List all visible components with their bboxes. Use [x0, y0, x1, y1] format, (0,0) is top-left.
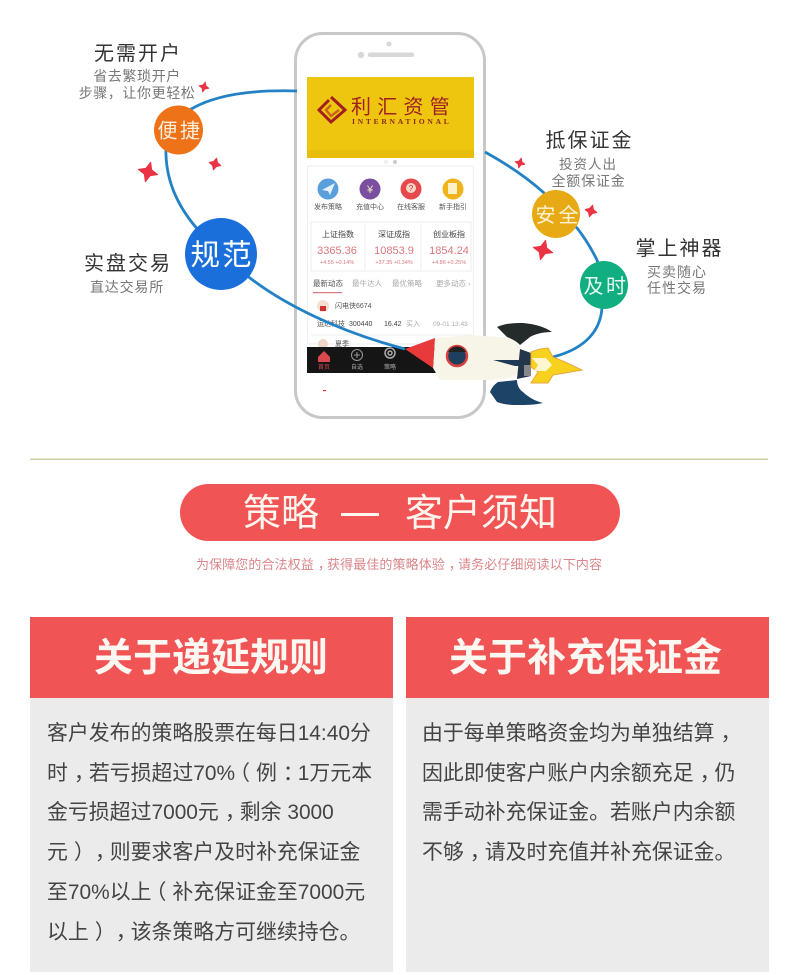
panel text: 因此即使客户账户内余额充足 ，仍	[422, 762, 735, 785]
nav labels: 策略	[384, 363, 396, 371]
icon: publish: 发布策略	[314, 202, 342, 211]
index: Shanghai: 上证指数	[322, 229, 354, 239]
icon: guide: 新手指引	[439, 202, 467, 211]
label: 掌上神器: 掌上神器	[636, 237, 724, 260]
small red mark	[323, 390, 326, 391]
phone speaker and camera	[358, 42, 414, 58]
icon: recharge: ¥	[366, 184, 374, 196]
feed tabs: 更多动态 ›	[436, 278, 471, 288]
label: 掌上神器	[636, 237, 724, 296]
icon: add	[352, 350, 362, 360]
label: 抵保证金	[546, 129, 634, 189]
feed tabs: 最优策略	[392, 278, 422, 288]
icon: guide	[439, 178, 467, 211]
rocket centre fin	[493, 360, 548, 366]
panel text: 以上 ），该条策略方可继续持仓。	[47, 921, 360, 944]
connecting curve	[166, 91, 604, 357]
node: 便捷: 便捷	[158, 120, 202, 142]
feed item: 闪电侠6674	[335, 301, 372, 310]
panel text: 金亏损超过7000元 ，剩余 3000	[47, 801, 334, 824]
nav labels: 自选	[351, 363, 363, 371]
decorative stars	[136, 81, 598, 262]
label: 掌上神器: 任性交易	[647, 280, 707, 296]
rocket nose	[405, 338, 435, 368]
app menu icons	[314, 178, 467, 211]
index: Shanghai	[317, 229, 357, 266]
phone body	[296, 34, 484, 418]
panel text: 客户发布的策略股票在每日14:40分	[47, 722, 371, 745]
panel background	[406, 617, 769, 972]
carousel dots	[384, 160, 397, 164]
feed tabs: 最牛达人	[352, 278, 382, 288]
rocket body	[433, 335, 522, 380]
index: Shenzhen: +37.35 +0.34%	[375, 260, 413, 266]
feed tabs: 最新动态	[313, 278, 343, 288]
feed item: 09-01 13:43	[433, 321, 468, 328]
label: 抵保证金: 投资人出	[559, 157, 617, 172]
panel heading: 关于补充保证金	[449, 637, 722, 680]
label: 实盘交易	[84, 252, 172, 295]
menu panel border	[308, 166, 474, 344]
panel background	[30, 617, 393, 972]
label: 实盘交易: 实盘交易	[84, 252, 172, 275]
node: 规范	[185, 218, 257, 290]
panel text	[47, 722, 372, 944]
nav labels: 首页	[318, 363, 330, 371]
banner: company logo	[307, 77, 474, 158]
subtitle: 为保障您的合法权益 ，获得最佳的策略体验 ，请务必仔细阅读以下内容	[196, 557, 602, 572]
label: 掌上神器: 买卖随心	[647, 264, 707, 280]
feed item: 16.42	[384, 321, 402, 328]
panel: 关于递延规则	[30, 617, 393, 972]
panel heading: 关于递延规则	[94, 637, 328, 680]
banner: 策略 客户须知: 策略	[243, 493, 319, 535]
panel text: 不够 ，请及时充值并补充保证金。	[422, 841, 735, 864]
node: 安全: 安全	[536, 204, 582, 227]
feed item: 买入	[406, 320, 420, 328]
label: 抵保证金: 全额保证金	[552, 173, 626, 189]
label: 无需开户: 步骤，让你更轻松	[79, 85, 195, 101]
rocket	[405, 323, 582, 405]
panel text: 由于每单策略资金均为单独结算 ，	[422, 722, 741, 745]
index: Shanghai: +4.55 +0.14%	[320, 260, 354, 266]
label: 实盘交易: 直达交易所	[90, 279, 164, 295]
market index panel	[311, 222, 471, 271]
node: 安全	[532, 190, 582, 238]
index: Shenzhen: 10853.9	[374, 245, 414, 257]
node: 及时: 及时	[584, 275, 628, 298]
index: ChiNext: 1854.24	[429, 245, 469, 257]
index: Shenzhen	[374, 229, 414, 266]
icon: home	[318, 351, 330, 362]
icon: target	[385, 348, 395, 358]
avatar	[317, 300, 329, 312]
panel header	[406, 617, 769, 698]
panel text: 至70%以上（ 补充保证金至7000元	[47, 881, 365, 904]
icon: recharge: 充值中心	[356, 202, 384, 211]
node: 及时	[580, 261, 628, 309]
panel text: 需手动补充保证金。若账户内余额	[422, 801, 735, 824]
panel header	[30, 617, 393, 698]
rocket flame	[531, 348, 582, 383]
index: Shanghai: 3365.36	[317, 245, 357, 257]
index: ChiNext	[429, 229, 469, 266]
node: 便捷	[154, 106, 203, 154]
panel text: 时 ，若亏损超过70%（ 例 ：1万元本	[47, 762, 372, 785]
feed item	[311, 300, 472, 349]
label: 无需开户: 无需开户	[94, 42, 182, 65]
panel text: 元 ），则要求客户及时补充保证金	[47, 841, 361, 864]
index: ChiNext: +4.86 +0.25%	[432, 260, 466, 266]
rocket top fin	[497, 323, 552, 345]
panel: 关于补充保证金	[406, 617, 769, 972]
node: 规范: 规范	[190, 239, 254, 272]
banner: 策略 客户须知: 客户须知	[405, 493, 557, 535]
index: ChiNext: 创业板指	[433, 229, 465, 239]
feed tabs	[313, 278, 471, 293]
rocket porthole	[447, 346, 467, 366]
phone mockup	[296, 34, 484, 418]
bottom navigation bar	[307, 347, 445, 373]
logo name: 利汇资管	[351, 96, 456, 118]
logo latin subtitle: INTERNATIONAL	[352, 117, 452, 126]
icon: support	[397, 178, 425, 211]
rocket bottom fin	[490, 380, 543, 405]
section divider	[30, 458, 768, 460]
icon: support: 在线客服	[397, 202, 425, 211]
icon: publish	[314, 178, 342, 211]
icon: recharge	[356, 178, 384, 211]
label: 无需开户	[79, 42, 195, 101]
logo mark	[319, 97, 345, 122]
label: 抵保证金: 抵保证金	[546, 129, 634, 152]
rocket tail	[517, 349, 531, 379]
feed item: 夏季	[335, 339, 349, 348]
nav labels	[318, 363, 396, 371]
index: Shenzhen: 深证成指	[378, 229, 410, 239]
feed item: 300440	[349, 321, 372, 328]
panel text	[422, 722, 741, 864]
feed item: 运达科技	[317, 319, 345, 328]
banner: 策略 客户须知	[180, 484, 620, 541]
icon: support: ?	[409, 184, 414, 193]
label: 无需开户: 省去繁琐开户	[93, 68, 181, 84]
